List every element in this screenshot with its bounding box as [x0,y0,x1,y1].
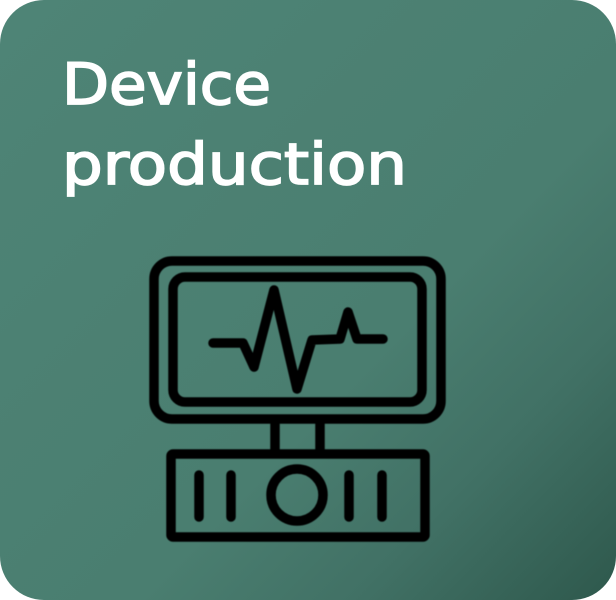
base controls [199,475,382,517]
title: Device production [62,52,407,198]
icon: medical monitor with heartbeat [154,261,441,537]
monitor screen [173,277,422,402]
base dial [271,469,323,521]
base unit [171,454,425,537]
title: Device production: production [62,132,407,198]
title: Device production: Device [62,52,271,118]
heartbeat line [213,290,383,389]
monitor outer frame [154,261,441,419]
monitor stand [275,423,320,452]
